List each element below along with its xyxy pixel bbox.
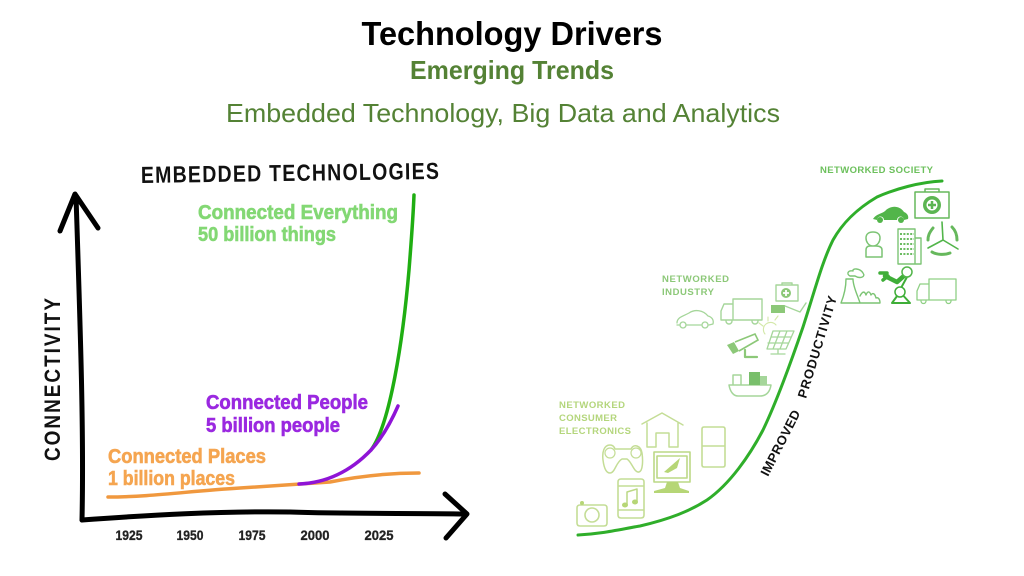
icon: office building [898, 229, 921, 264]
label: networked consumer electronics: NETWORKED [559, 400, 625, 411]
x axis arrow [82, 494, 467, 538]
label: connected places: 1 billion places [108, 468, 235, 490]
chart heading: EMBEDDED TECHNOLOGIES [141, 158, 439, 188]
icon: house [642, 413, 683, 447]
label: networked industry [662, 274, 729, 298]
icon: truck outline [721, 299, 762, 324]
tagline: Embedded Technology, Big Data and Analytics [226, 98, 780, 128]
y axis arrow [60, 194, 98, 520]
icon: phone with music note [618, 479, 644, 518]
title: Technology Drivers [362, 15, 662, 52]
label: connected people [206, 392, 368, 437]
panel: networked productivity curve [559, 165, 958, 535]
icon: robot arm [880, 267, 912, 303]
x axis years: 1950 [176, 528, 204, 543]
curve label: improved: IMPROVED [757, 407, 803, 478]
curve label: productivity: PRODUCTIVITY [795, 294, 840, 400]
label: networked consumer electronics: CONSUMER [559, 413, 617, 424]
y axis label: CONNECTIVITY [41, 298, 65, 461]
x axis years: 1975 [238, 528, 266, 543]
label: networked industry: NETWORKED [662, 274, 729, 285]
subtitle: Emerging Trends [410, 55, 614, 85]
green line: connected everything [371, 195, 414, 450]
x axis years: 2000 [300, 528, 330, 543]
icon: medical case [776, 283, 798, 301]
x axis years [116, 528, 394, 543]
label: connected places: Connected Places [108, 446, 266, 468]
label: networked consumer electronics: ELECTRONICS [559, 426, 631, 437]
icon: monitor [654, 452, 690, 493]
icon: game controller [603, 445, 643, 473]
label: connected everything: Connected Everything [198, 202, 398, 224]
x axis years: 1925 [116, 528, 143, 543]
icon: car solid [873, 207, 908, 223]
label: networked society: NETWORKED SOCIETY [820, 165, 934, 176]
icon: medical device [771, 303, 806, 313]
panel: embedded technologies chart [41, 158, 467, 543]
label: connected people: 5 billion people [206, 415, 340, 437]
s-curve [578, 181, 942, 535]
icon: camera [577, 501, 607, 526]
label: networked industry: INDUSTRY [662, 287, 715, 298]
label: connected places [108, 446, 266, 490]
icon: medical case green [915, 189, 949, 218]
x axis years: 2025 [364, 528, 394, 543]
icon: factory [841, 269, 880, 303]
label: connected everything: 50 billion things [198, 224, 336, 246]
orange line: connected places [108, 473, 419, 497]
label: connected everything [198, 202, 398, 246]
icon: security camera [727, 334, 758, 357]
icon: wind turbine [928, 222, 958, 254]
label: connected people: Connected People [206, 392, 368, 414]
purple line: connected people [299, 406, 398, 484]
label: networked consumer electronics [559, 400, 631, 437]
icon: fridge [702, 427, 725, 467]
icon: solar panel [759, 316, 794, 354]
icon: cargo ship [729, 372, 771, 396]
icon: person [866, 232, 882, 257]
icon: truck [917, 279, 956, 304]
icon: car outline [677, 311, 713, 328]
